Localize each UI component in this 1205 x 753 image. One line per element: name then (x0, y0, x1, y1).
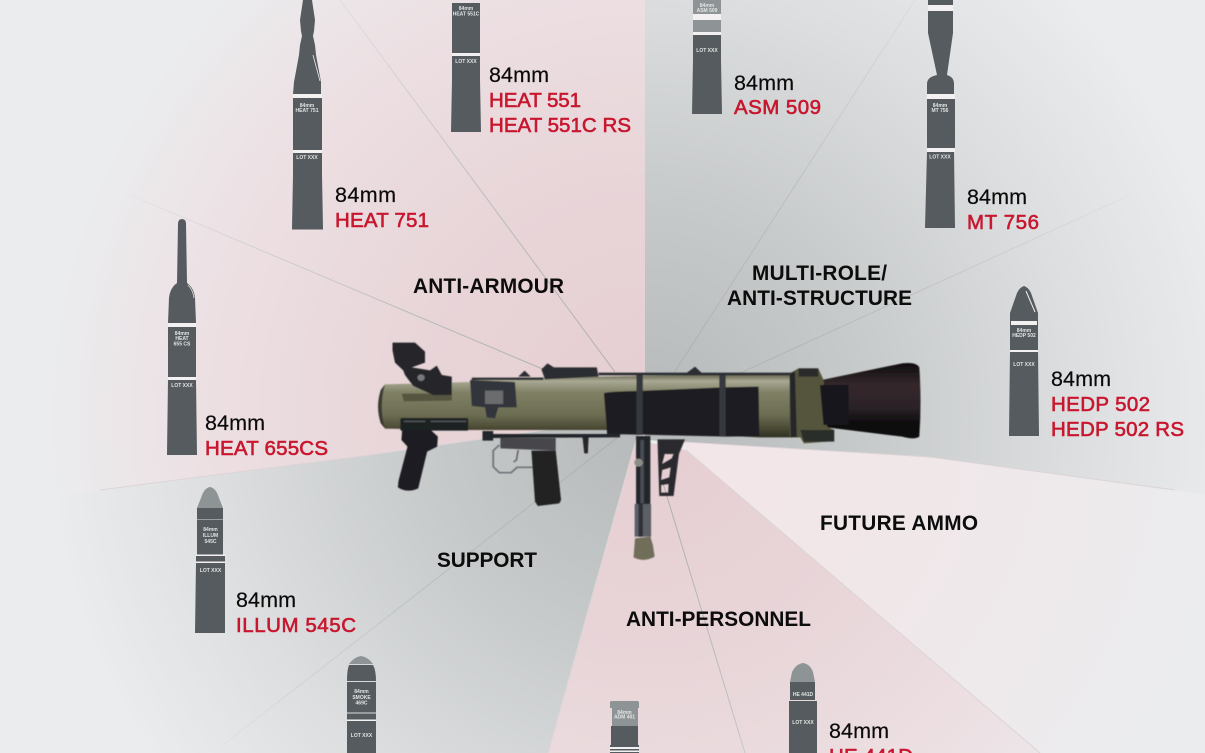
main tube (380, 373, 799, 437)
trigger guard (493, 445, 538, 473)
shell: ADM 401: ADM 401 (614, 714, 635, 720)
top rail and sight mount (472, 363, 791, 380)
shell: MT 756 (925, 0, 955, 228)
fore grip (398, 430, 438, 491)
shell: HE 441D (789, 663, 817, 753)
shell: HEAT 551: HEAT 551C (453, 12, 480, 18)
shell: HEAT 655CS: 655 CS (174, 342, 191, 348)
shell: SMOKE 469C (347, 656, 376, 753)
shell: SMOKE 469C: SMOKE (352, 695, 371, 701)
label: ASM 509: 84mm (734, 71, 794, 95)
label: HEDP 502: 84mm (1051, 367, 1111, 391)
recoilless rifle (378, 343, 921, 560)
label: HE 441D (829, 719, 913, 753)
pistol grip (531, 451, 561, 506)
shell: HE 441D: LOT XXX (792, 720, 814, 726)
label: HEAT 551: HEAT 551C RS (489, 114, 631, 137)
shell: SMOKE 469C: LOT XXX (351, 733, 373, 739)
sector: future ammo (684, 442, 1205, 753)
heading: multi-role / anti-structure (727, 262, 912, 310)
label: HEAT 751: HEAT 751 (335, 209, 429, 232)
heading: multi-role / anti-structure: MULTI-ROLE/ (752, 262, 887, 285)
shell: HE 441D: HE 441D (793, 692, 814, 698)
label: HEAT 551 (489, 63, 631, 137)
shell: HEAT 551: LOT XXX (455, 59, 477, 65)
shell: MT 756: 84mm (933, 103, 948, 109)
label: HEAT 551: 84mm (489, 63, 549, 87)
label: ASM 509 (734, 71, 821, 119)
label: HEDP 502: HEDP 502 (1051, 393, 1150, 416)
shell: HEAT 655CS: 84mm (175, 331, 190, 337)
fore rail (400, 418, 468, 431)
trigger housing (500, 438, 556, 451)
label: MT 756 (967, 185, 1039, 234)
shell: HEAT 655CS (167, 219, 197, 455)
shell: HEDP 502 (1009, 286, 1039, 436)
label: MT 756: MT 756 (967, 211, 1039, 234)
sector: support (0, 415, 645, 753)
label: MT 756: 84mm (967, 185, 1027, 209)
shell: SMOKE 469C: 469C (356, 700, 368, 706)
shell: ASM 509 (692, 0, 722, 114)
heading: multi-role / anti-structure: ANTI-STRUCTURE (727, 287, 912, 310)
venturi (822, 363, 921, 438)
shell: HEAT 751: HEAT 751 (296, 108, 319, 114)
shell: HEAT 751: 84mm (300, 103, 315, 109)
black wrap (604, 387, 759, 437)
label: ILLUM 545C (236, 588, 356, 637)
shell: MT 756: LOT XXX (929, 154, 951, 160)
heading: anti-armour: ANTI-ARMOUR (413, 275, 564, 298)
heading: anti-personnel: ANTI-PERSONNEL (626, 608, 811, 631)
label: HEDP 502: HEDP 502 RS (1051, 418, 1184, 441)
shell: ASM 509: LOT XXX (696, 48, 718, 54)
shoulder rest (657, 439, 685, 496)
shell: ASM 509: 84mm (700, 3, 715, 9)
label: HEAT 655CS: HEAT 655CS (205, 437, 328, 460)
shell: HEAT 751 (292, 0, 323, 230)
shell: ADM 401: 84mm (617, 710, 632, 716)
sector: anti-personnel (548, 440, 1040, 753)
label: ILLUM 545C: ILLUM 545C (236, 614, 356, 637)
mid bracket (470, 380, 517, 418)
shell: SMOKE 469C: 84mm (354, 689, 369, 695)
front sight (392, 343, 452, 401)
shell: ADM 401 (610, 701, 639, 753)
shell: HEAT 551 (451, 3, 481, 132)
label: HEAT 551: HEAT 551 (489, 89, 581, 112)
shell: HEDP 502: HEDP 502 (1012, 333, 1036, 339)
label: HEAT 751 (335, 183, 429, 232)
heading: support: SUPPORT (437, 549, 537, 572)
shell: ILLUM 545C: LOT XXX (200, 568, 222, 574)
label: HE 441D: 84mm (829, 719, 889, 743)
shell: ILLUM 545C: 84mm (203, 527, 218, 533)
shell: HEAT 655CS: HEAT (175, 336, 189, 342)
shell: ASM 509: ASM 509 (697, 8, 718, 14)
shell: HEDP 502: 84mm (1017, 328, 1032, 334)
label: HEAT 655CS (205, 411, 328, 460)
bipod leg (634, 436, 655, 560)
shell: MT 756: MT 756 (932, 108, 949, 114)
sector: multi-role / anti-structure (645, 0, 1205, 494)
label: ASM 509: ASM 509 (734, 96, 821, 119)
label: ILLUM 545C: 84mm (236, 588, 296, 612)
shell: HEAT 551: 84mm (459, 6, 474, 12)
shell: HEAT 655CS: LOT XXX (171, 383, 193, 389)
label: HEDP 502 (1051, 367, 1184, 441)
shell: HEDP 502: LOT XXX (1013, 362, 1035, 368)
sector: anti-armour (0, 0, 645, 504)
under rail (482, 431, 620, 441)
label: HEAT 751: 84mm (335, 183, 396, 207)
heading: future ammo: FUTURE AMMO (820, 512, 978, 535)
shell: HEAT 751: LOT XXX (296, 155, 318, 161)
retaining bands (636, 375, 726, 437)
breech collar (790, 368, 834, 443)
shell: ILLUM 545C (195, 487, 225, 633)
shell: ILLUM 545C: ILLUM (203, 533, 218, 539)
shell: ILLUM 545C: 545C (205, 539, 217, 545)
label: HEAT 655CS: 84mm (205, 411, 265, 435)
